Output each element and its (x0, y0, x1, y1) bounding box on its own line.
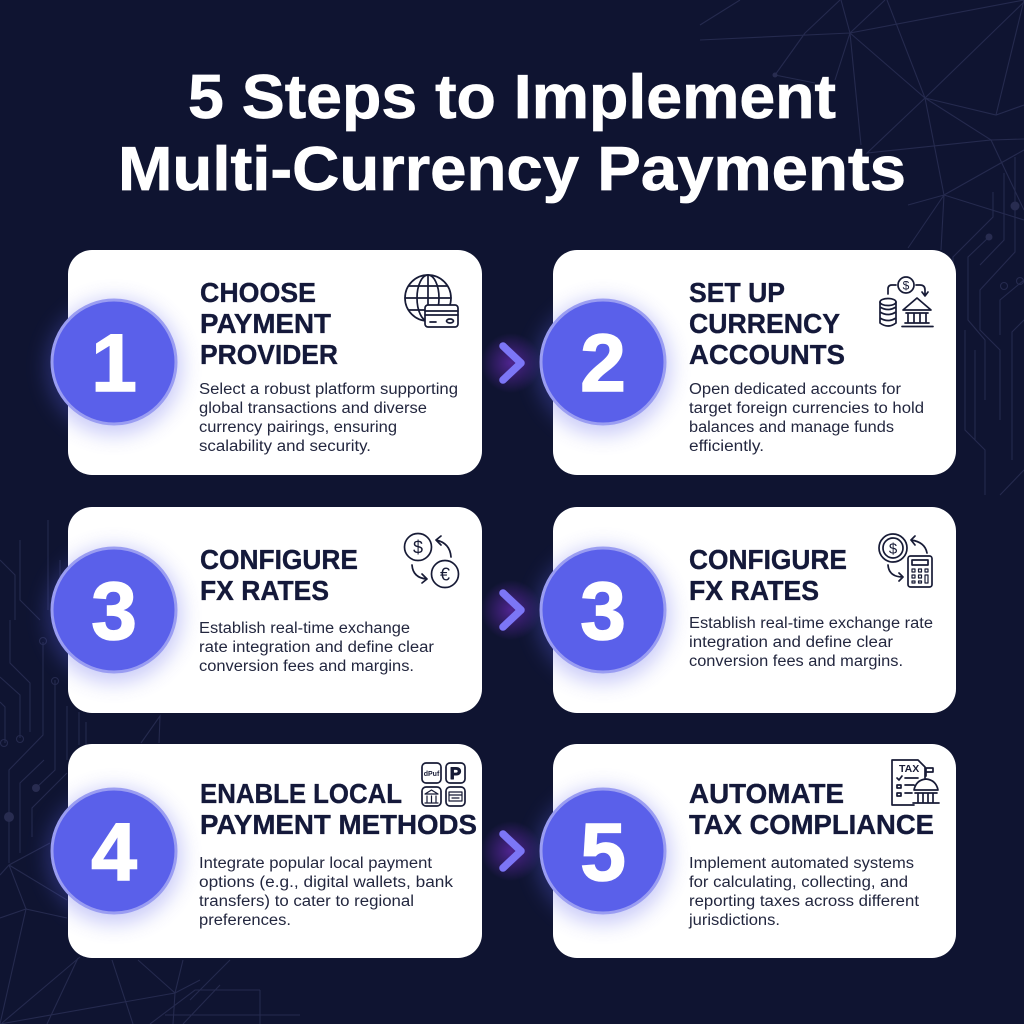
heading: choose payment provider: PAYMENT (200, 308, 331, 339)
heading: set up currency accounts: CURRENCY (689, 308, 840, 339)
step number 3 (second): 3 (580, 566, 626, 657)
icon: local payment method tiles: P (450, 764, 461, 783)
step number 5: 5 (580, 807, 626, 898)
heading: configure fx rates: CONFIGURE (200, 544, 358, 575)
icon: dollar euro exchange: € (440, 564, 450, 584)
arrow: step 3 to step 3 (481, 580, 541, 640)
heading: set up currency accounts: ACCOUNTS (689, 339, 845, 370)
heading: automate tax compliance: AUTOMATE (689, 778, 844, 809)
title: 5 Steps to Implement (188, 63, 836, 132)
body text: Integrate popular local payment (199, 855, 433, 872)
icon: tax document and government building: TAX (899, 763, 919, 775)
step number 2: 2 (580, 318, 626, 409)
body text: Establish real-time exchange rate (689, 615, 933, 632)
body text: jurisdictions. (688, 912, 780, 929)
body text: global transactions and diverse (199, 400, 427, 417)
body text: for calculating, collecting, and (689, 874, 908, 891)
card 5: enable local payment methods (46, 744, 482, 958)
step number 4 (52, 789, 176, 913)
heading: choose payment provider: PROVIDER (200, 339, 338, 370)
body text (199, 381, 458, 455)
card 2: set up currency accounts (535, 250, 956, 475)
card 3: configure fx rates (46, 507, 482, 713)
body text (199, 620, 434, 675)
body text: conversion fees and margins. (689, 653, 903, 670)
icon: dollar euro exchange (404, 534, 458, 588)
arrow: step 1 to step 2 (481, 333, 541, 393)
icon: coin and calculator (879, 534, 932, 587)
body text: Open dedicated accounts for (689, 381, 901, 398)
body text: rate integration and define clear (199, 639, 434, 656)
body text (689, 615, 933, 670)
card 6: automate tax compliance (535, 744, 956, 958)
body text: Implement automated systems (689, 855, 914, 872)
icon: coins and bank with dollar (880, 277, 933, 326)
heading: set up currency accounts: SET UP (689, 277, 785, 308)
body text: currency pairings, ensuring (199, 419, 397, 436)
body text: target foreign currencies to hold (689, 400, 924, 417)
step number 3: 3 (91, 566, 137, 657)
body text: options (e.g., digital wallets, bank (199, 874, 453, 891)
heading: configure fx rates (200, 544, 358, 606)
body text: balances and manage funds (689, 419, 894, 436)
step number 3 (52, 548, 176, 672)
body text (689, 381, 924, 455)
step number 1 (52, 300, 176, 424)
card 4: configure fx rates with calculator (535, 507, 956, 713)
icon: coin and calculator: $ (889, 540, 898, 558)
body text: reporting taxes across different (689, 893, 920, 910)
step number 5 (541, 789, 665, 913)
icon: dollar euro exchange: $ (413, 538, 423, 558)
heading: enable local payment methods (200, 778, 477, 840)
title: Multi-Currency Payments (118, 135, 906, 204)
body text: transfers) to cater to regional (199, 893, 414, 910)
heading: choose payment provider: CHOOSE (200, 277, 316, 308)
body text: scalability and security. (199, 438, 371, 455)
step number 4: 4 (91, 807, 137, 898)
step number 2 (541, 300, 665, 424)
arrow: step 4 to step 5 (481, 821, 541, 881)
body text: Select a robust platform supporting (199, 381, 458, 398)
body text: preferences. (199, 912, 291, 929)
body text: integration and define clear (689, 634, 893, 651)
heading: automate tax compliance: TAX COMPLIANCE (689, 809, 934, 840)
icon: local payment method tiles (422, 763, 465, 806)
icon: coins and bank with dollar: $ (903, 278, 910, 292)
icon: tax document and government building (892, 760, 939, 805)
heading: configure fx rates: FX RATES (200, 575, 329, 606)
heading: configure fx rates: FX RATES (689, 575, 819, 606)
body text (688, 855, 920, 929)
heading: enable local payment methods: ENABLE LOCAL (200, 778, 402, 809)
body text (199, 855, 453, 929)
heading: enable local payment methods: PAYMENT METHODS (200, 809, 477, 840)
body text: efficiently. (689, 438, 764, 455)
card 1: choose payment provider (46, 250, 482, 475)
icon: globe and credit card (405, 275, 458, 327)
icon: local payment method tiles: dPuf (424, 771, 440, 778)
step number 3 (second) (541, 548, 665, 672)
heading: configure fx rates (689, 544, 847, 606)
body text: conversion fees and margins. (199, 658, 414, 675)
heading: automate tax compliance (689, 778, 934, 840)
heading: choose payment provider (200, 277, 338, 370)
body text: Establish real-time exchange (199, 620, 410, 637)
heading: configure fx rates: CONFIGURE (689, 544, 847, 575)
title (118, 63, 906, 204)
heading: set up currency accounts (689, 277, 845, 370)
step number 1: 1 (91, 318, 137, 409)
